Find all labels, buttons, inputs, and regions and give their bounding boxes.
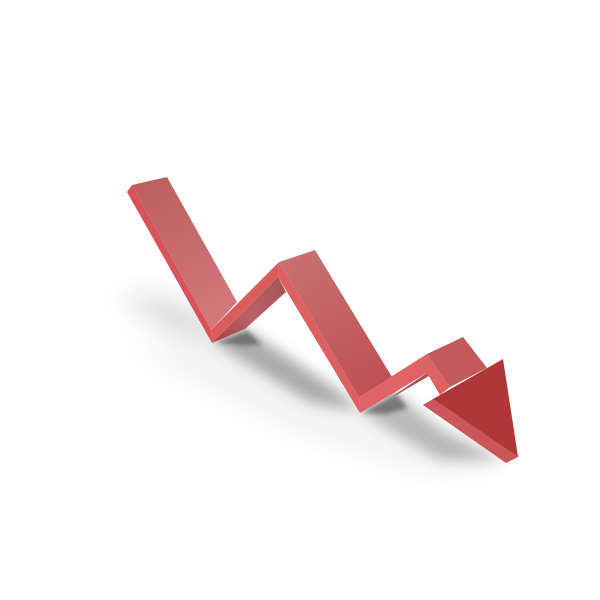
rising band 1 underside bbox=[212, 277, 286, 343]
segment 1 top face bbox=[132, 177, 237, 330]
ground shadow bbox=[118, 298, 506, 470]
segment 2 top face bbox=[279, 250, 392, 397]
arrow head main face bbox=[433, 359, 518, 457]
segment 1: long descending band bbox=[127, 177, 237, 343]
segment 2: descending band bbox=[278, 250, 392, 413]
segment 3 side edge bbox=[427, 354, 450, 395]
arrow head bbox=[423, 359, 518, 463]
rising band 2 underside bbox=[393, 373, 429, 396]
segment 1 side edge bbox=[127, 185, 212, 343]
segment 2 side edge bbox=[278, 262, 360, 413]
segment 3 top face bbox=[427, 337, 487, 387]
segment 3: short descending band bbox=[427, 337, 487, 395]
rising band 1 bbox=[211, 262, 286, 343]
rising band 2 bbox=[359, 354, 429, 413]
arrow head lower side bbox=[423, 399, 518, 463]
rising band 1 top edge bbox=[211, 262, 279, 343]
rising band 2 top edge bbox=[359, 354, 427, 413]
